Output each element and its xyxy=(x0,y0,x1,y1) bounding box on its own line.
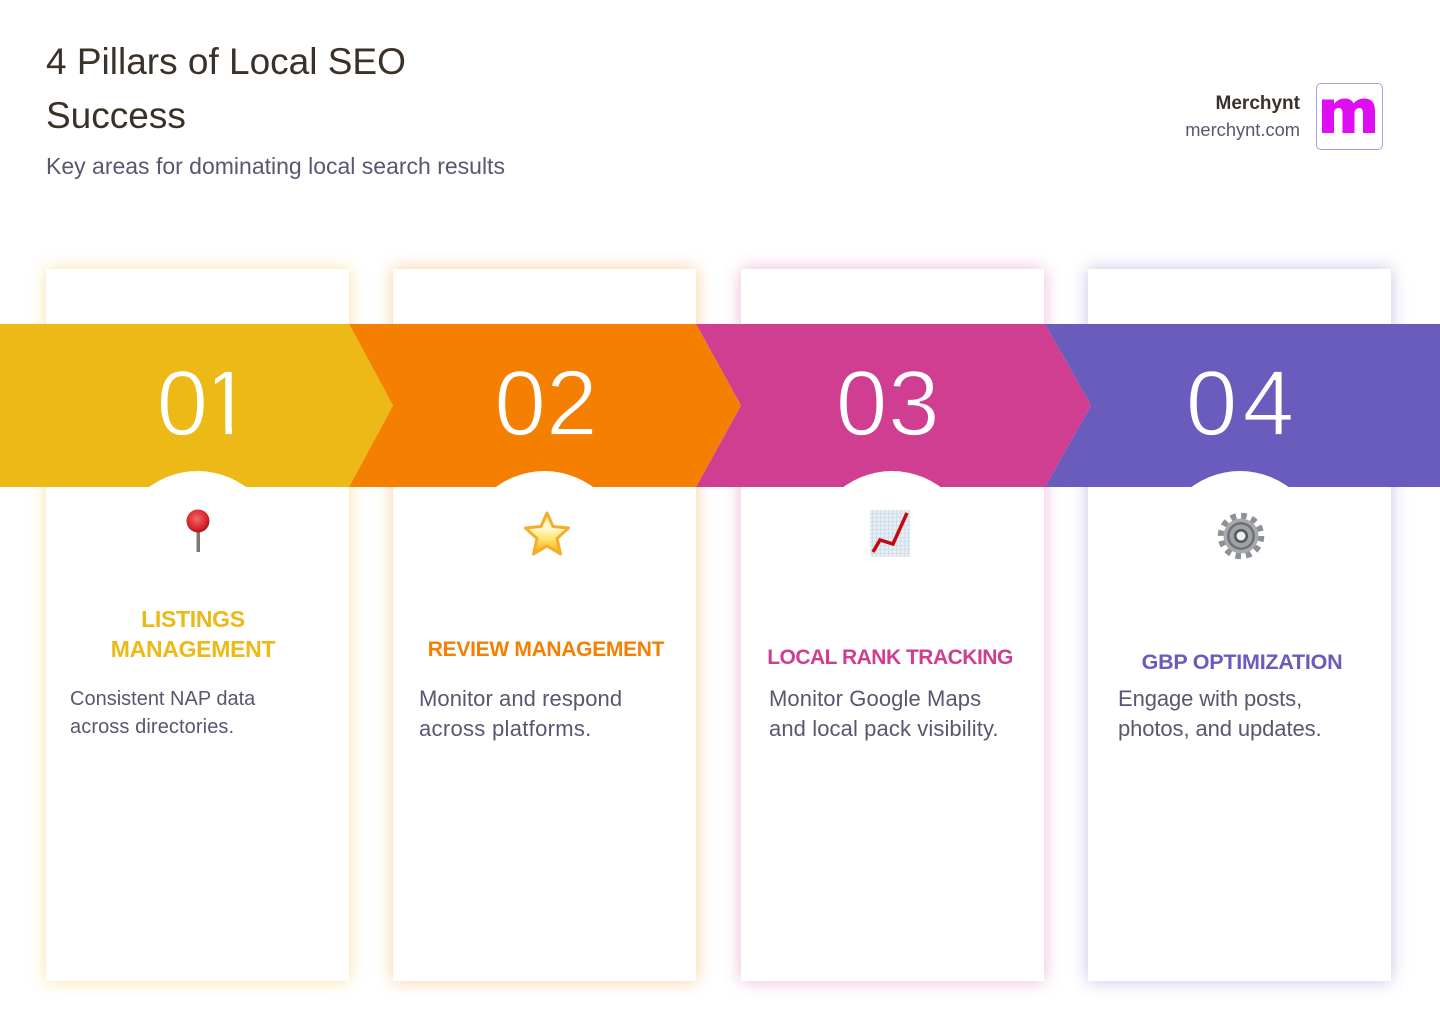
card 4 text: photos, and updates. xyxy=(1118,716,1322,741)
card 1 heading xyxy=(111,606,276,662)
card 4 text: Engage with posts, xyxy=(1118,686,1302,711)
brand block xyxy=(1185,83,1383,150)
card 4 background xyxy=(1088,269,1391,981)
card 4 heading: GBP OPTIMIZATION xyxy=(1142,650,1342,674)
card 1 text: across directories. xyxy=(70,716,234,738)
arrow 3 xyxy=(696,324,1091,487)
arrow 2 xyxy=(349,324,741,487)
number 04: 04 xyxy=(1186,351,1299,455)
card 1 text xyxy=(70,688,256,738)
card 3 heading: LOCAL RANK TRACKING xyxy=(767,646,1013,669)
notch 2 xyxy=(463,471,626,634)
card 3 text xyxy=(769,686,999,741)
arrow 1 xyxy=(0,324,393,487)
card 3 text: and local pack visibility. xyxy=(769,716,999,741)
card 3 background xyxy=(741,269,1044,981)
header: title block xyxy=(46,41,505,179)
card 2 background xyxy=(393,269,696,981)
number 02: 02 xyxy=(494,351,598,455)
subtitle: Key areas for dominating local search results xyxy=(46,153,505,179)
arrow 4 xyxy=(1045,324,1440,487)
notch 4 xyxy=(1158,471,1322,634)
icon: gear xyxy=(1218,512,1264,560)
title: 4 Pillars of Local SEO xyxy=(46,41,406,82)
number 01 xyxy=(156,351,232,455)
logo xyxy=(1316,83,1383,150)
brand url: merchynt.com xyxy=(1185,119,1300,140)
brand name: Merchynt xyxy=(1216,93,1300,114)
icon: pin xyxy=(186,510,210,552)
card 1 heading: LISTINGS xyxy=(141,606,245,632)
icon: star xyxy=(524,512,570,556)
card 1 background xyxy=(46,269,349,981)
icon: chart xyxy=(870,510,910,557)
title: Success xyxy=(46,95,186,136)
title xyxy=(46,41,406,136)
notch 3 xyxy=(810,471,974,634)
card 2 text: Monitor and respond xyxy=(419,686,622,711)
card 4 text xyxy=(1118,686,1322,741)
card 2 text xyxy=(419,686,622,741)
arrow banner xyxy=(0,324,1440,487)
card 3 text: Monitor Google Maps xyxy=(769,686,981,711)
card 1 heading: MANAGEMENT xyxy=(111,636,275,662)
card 2 text: across platforms. xyxy=(419,716,592,741)
number 03: 03 xyxy=(836,351,940,455)
number 01: 1 xyxy=(201,351,253,455)
number 01: 0 xyxy=(156,351,201,455)
card 1 text: Consistent NAP data xyxy=(70,688,255,710)
notch 1 xyxy=(116,471,279,634)
card 2 heading: REVIEW MANAGEMENT xyxy=(428,638,664,661)
